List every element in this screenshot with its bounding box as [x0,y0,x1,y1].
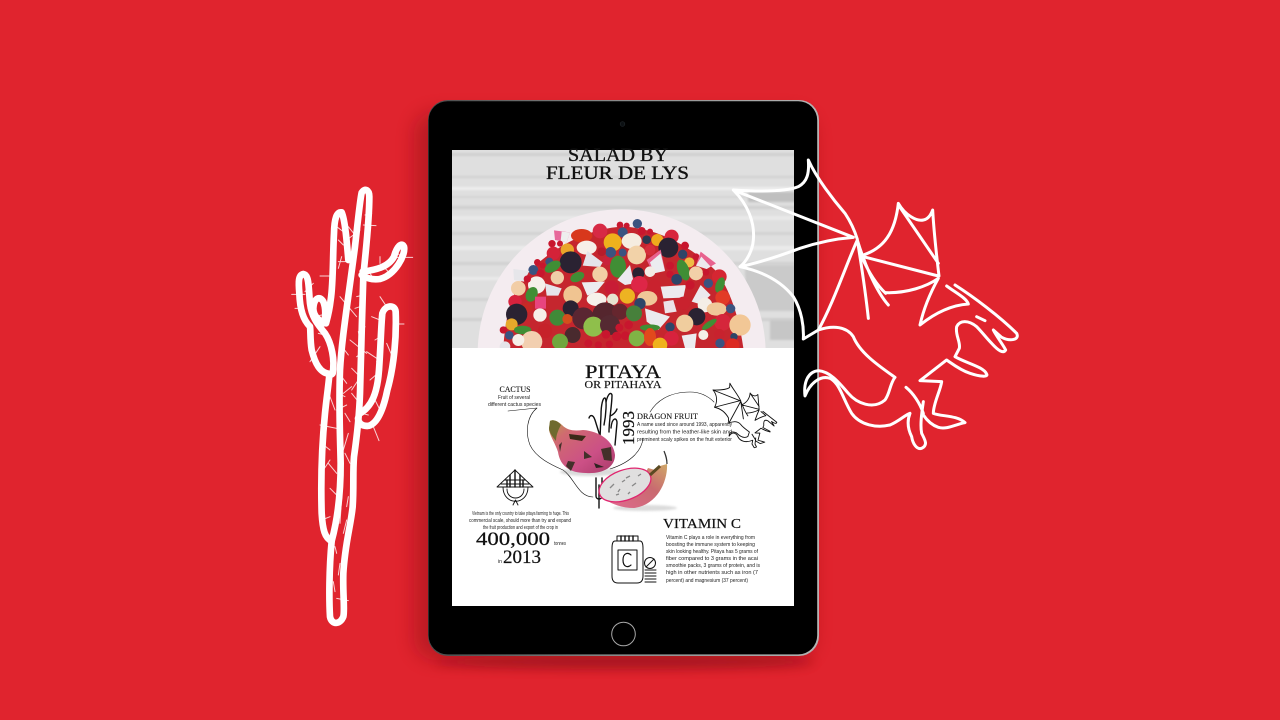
Vietnam production note: Vietnam is the only country to take pitaya farming to huge. This [472,511,569,517]
vitamin C note: VITAMIN C [663,517,741,532]
icon: small dragon sketch [713,383,777,448]
vitamin C note: skin looking healthy. Pitaya has 5 grams of [666,549,758,555]
connector lines [508,392,714,497]
fruit pieces [500,219,751,352]
photo title [546,145,689,184]
tablet [428,100,819,656]
salad plate and fruit [478,210,766,348]
dragon fruit note [619,411,732,445]
tablet shadow [414,112,815,669]
cactus outline [299,190,404,623]
vitamin C note: boosting the immune system to keeping [666,542,755,548]
illustration: white dragon [733,160,1017,449]
salad photo panel [452,148,794,348]
icon: small cactus sketch [589,393,617,508]
heading: Pitaya [584,362,662,391]
wood background [440,150,810,348]
tablet body [428,100,819,656]
home button [612,622,635,646]
vitamin C note: fiber compared to 3 grams in the acai [666,556,758,562]
vitamin C note: Vitamin C plays a role in everything from [666,535,755,541]
photo title: FLEUR DE LYS [546,163,689,184]
stat: 400,000 tonnes: tonnes [554,541,566,547]
dragon fruit note: prominent scaly spikes on the fruit exterior [637,437,732,443]
dragon wing, rear [863,203,1017,428]
infographic panel [452,348,794,606]
heading: Pitaya: OR PITAHAYA [584,380,662,391]
stat: in 2013: 2013 [503,547,541,568]
icon: vitamin C jar [612,536,656,583]
photo: whole dragon fruit [549,420,620,476]
cactus note: CACTUS [500,385,530,394]
vitamin C note: percent) and magnesium (37 percent) [666,578,748,584]
cactus spines [292,213,413,601]
stat: 400,000 tonnes [476,529,566,550]
stat: 400,000 tonnes: 400,000 [476,529,550,550]
dragon fruit note: A name used since around 1993, apparently [637,422,732,428]
vitamin C note [663,517,760,584]
vitamin C note: high in other nutrients such as iron (7 [666,570,758,576]
year 1993: 1993 [619,411,638,445]
cactus note: Fruit of several [498,395,530,401]
stat: in 2013: in [498,559,502,565]
screen [440,145,810,606]
dragon body and tail [805,327,926,449]
dragon fruit note: resulting from the leather-like skin and [637,430,732,436]
Vietnam production note: the fruit production and export of the crop in [483,525,558,531]
cactus note [488,385,541,408]
vitamin C note: smoothie packs, 3 grams of protein, and is [666,563,760,569]
icon: pyramid [497,470,533,505]
dragon fruit note: DRAGON FRUIT [637,411,699,421]
illustration: white cactus [292,190,413,623]
Vietnam production note: commercial scale, should more than try and expand [469,518,571,524]
dragon wing, front [733,160,888,339]
heading: Pitaya: PITAYA [585,362,661,383]
cactus note: different cactus species [488,402,541,408]
camera [620,122,625,126]
photo title: SALAD BY [568,145,668,166]
photo: halved dragon fruit [594,451,677,511]
Vietnam production note [469,511,571,531]
plate [478,210,766,348]
